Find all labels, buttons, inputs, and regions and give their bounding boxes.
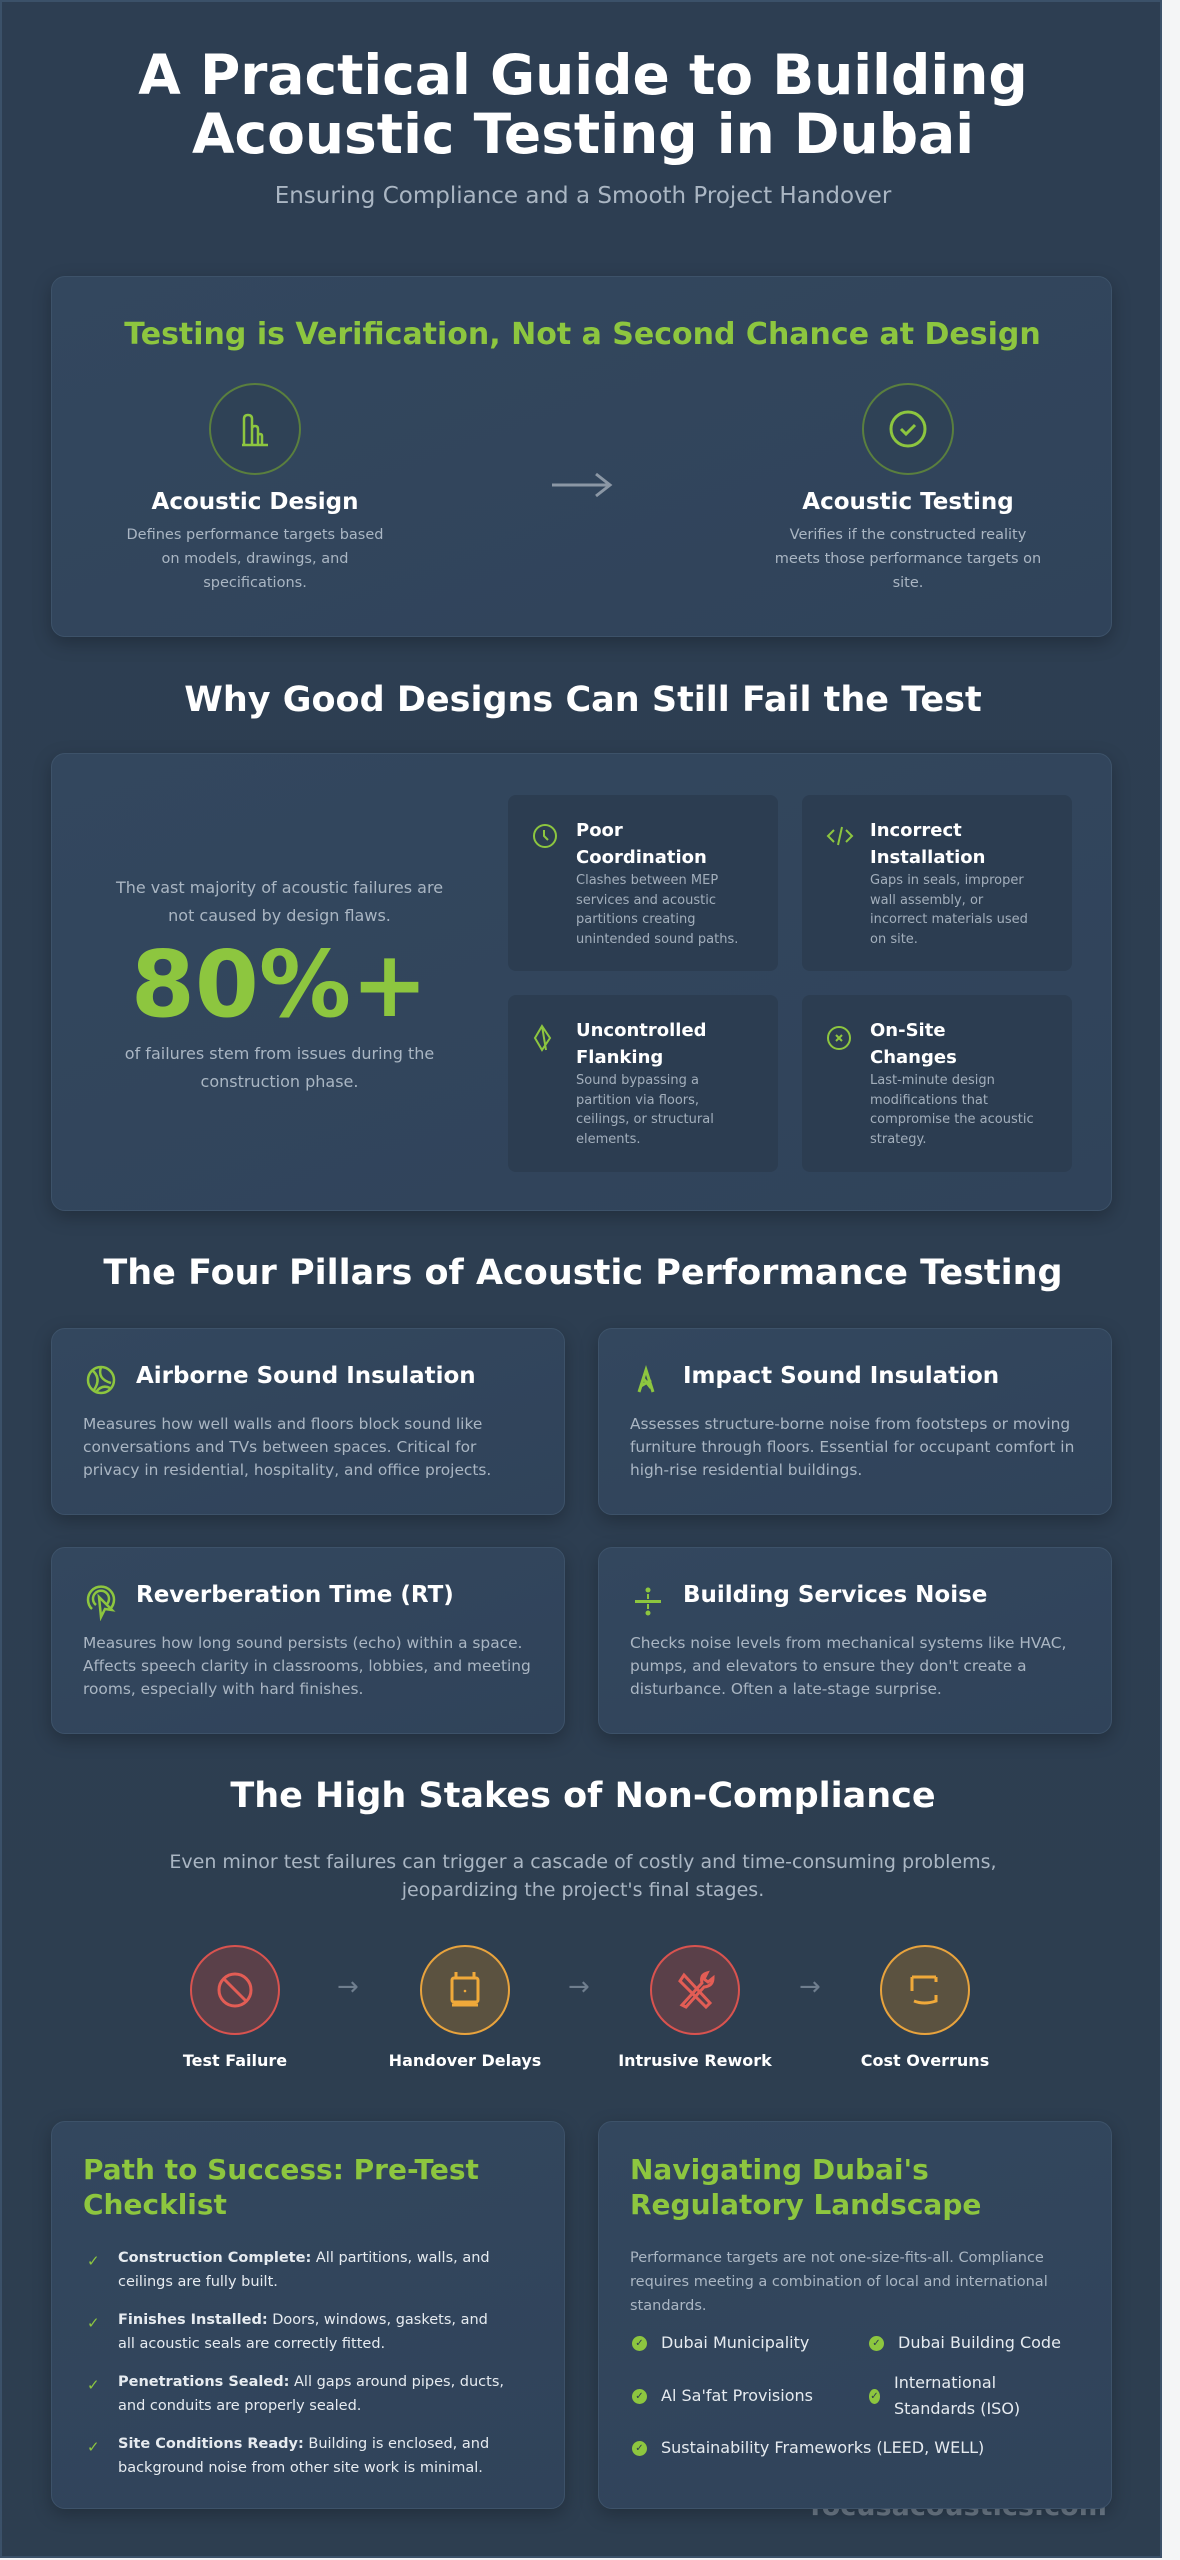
icon: flank: [534, 1024, 552, 1052]
paragraph: stakes: jeopardizing the project's final stages.: [402, 1879, 764, 1901]
title: Acoustic Testing in Dubai: [192, 102, 974, 166]
panel: checklist: and conduits are properly sealed.: [118, 2398, 361, 2414]
text: testing: site.: [893, 575, 923, 591]
icon: cost overruns: [880, 1945, 970, 2035]
arrow: →: [568, 1972, 590, 2002]
paragraph: stakes: Even minor test failures can trigger a cascade of costly and time-consuming problems,: [169, 1851, 997, 1873]
heading: high stakes: The High Stakes of Non-Compliance: [230, 1776, 936, 1816]
pillar: services noise: Building Services Noise: [683, 1582, 987, 1608]
text: design: [126, 489, 384, 591]
card: poor coordination: Clashes between MEP services and acoustic partitions creating unintended sound paths.: [576, 873, 738, 946]
text: design: specifications.: [203, 575, 307, 591]
stat text: not caused by design flaws.: [168, 906, 391, 925]
panel: regulatory: International Standards (ISO): [894, 2373, 1020, 2418]
text: design: Defines performance targets based: [126, 527, 384, 543]
paragraph: stakes: [169, 1851, 997, 1901]
stat text: of failures stem from issues during the: [125, 1044, 434, 1063]
panel: checklist: Finishes Installed: Doors, windows, gaskets, and: [118, 2312, 488, 2328]
panel: checklist: Construction Complete: All partitions, walls, and: [118, 2250, 490, 2266]
card: incorrect installation: [802, 795, 1072, 971]
card: poor coordination: [508, 795, 778, 971]
panel: checklist: background noise from other site work is minimal.: [118, 2460, 483, 2476]
stat text: 80%+: [131, 931, 428, 1038]
label: cost overruns: Cost Overruns: [861, 2051, 989, 2070]
panel: regulatory: Sustainability Frameworks (LEED, WELL): [661, 2438, 984, 2457]
panel: verification: [51, 276, 1112, 637]
pillar: reverberation: Measures how long sound persists (echo) within a space. Affects speech clarity in classrooms, lobbies, and meeting rooms, especially with hard finishes.: [83, 1634, 531, 1698]
card: flanking: [508, 995, 778, 1172]
pillar: airborne: Airborne Sound Insulation: [136, 1363, 476, 1389]
heading: why designs fail: Why Good Designs Can Still Fail the Test: [184, 680, 982, 720]
pillar: airborne: [51, 1328, 565, 1515]
heading: regulatory: [630, 2153, 981, 2221]
icon: test failure: [190, 1945, 280, 2035]
item 4: [87, 2436, 489, 2476]
text: testing: Verifies if the constructed reality: [790, 527, 1026, 543]
label: test failure: Test Failure: [183, 2051, 287, 2070]
panel: regulatory: Al Sa'fat Provisions: [661, 2386, 813, 2405]
pillar: reverberation: [51, 1547, 565, 1734]
icon: reverb: [86, 1585, 116, 1621]
card: flanking: Sound bypassing a partition via floors, ceilings, or structural elements.: [576, 1073, 714, 1146]
icon: impact: [638, 1365, 654, 1392]
panel: checklist: ✓: [87, 2438, 100, 2456]
icon: testing: [862, 383, 954, 475]
panel: checklist: [51, 2121, 565, 2509]
icon: divide: [635, 1588, 661, 1616]
icon: handover delays: [420, 1945, 510, 2035]
card: on-site changes: Changes: [870, 1047, 957, 1068]
panel: regulatory: ✓: [635, 2338, 644, 2349]
card: flanking: Flanking: [576, 1047, 663, 1068]
card: incorrect installation: Gaps in seals, improper wall assembly, or incorrect materials used on site.: [870, 873, 1028, 946]
panel: checklist: Site Conditions Ready: Building is enclosed, and: [118, 2436, 489, 2452]
panel: checklist: all acoustic seals are correctly fitted.: [118, 2336, 385, 2352]
card: on-site changes: [802, 995, 1072, 1172]
text: design: Acoustic Design: [152, 489, 358, 515]
icon: design: [209, 383, 301, 475]
card: poor coordination: Poor: [576, 820, 623, 841]
pillar: impact: Assesses structure-borne noise from footsteps or moving furniture through floors. Essential for occupant comfort in high-rise residential buildings.: [630, 1415, 1074, 1479]
item: sustainability: [632, 2438, 984, 2457]
icon: rework: [650, 1945, 740, 2035]
arrow: [552, 473, 612, 497]
panel: regulatory: ✓: [870, 2391, 879, 2402]
item 3: [87, 2374, 504, 2414]
heading: checklist: [83, 2153, 479, 2221]
card: incorrect installation: Incorrect: [870, 820, 962, 841]
panel: regulatory: ✓: [635, 2391, 644, 2402]
heading: verification: Testing is Verification, Not a Second Chance at Design: [124, 317, 1041, 352]
pillar: impact: [598, 1328, 1112, 1515]
item: Dubai Building Code: [869, 2333, 1061, 2352]
item: Dubai Municipality: [632, 2333, 809, 2352]
item: ISO: [869, 2373, 1020, 2418]
panel: regulatory: ✓: [635, 2443, 644, 2454]
card: on-site changes: On-Site: [870, 1020, 946, 1041]
paragraph: regulatory: Performance targets are not one-size-fits-all. Compliance requires meeting a combination of local and international standards.: [630, 2250, 1048, 2314]
card: flanking: Uncontrolled: [576, 1020, 707, 1041]
panel: regulatory: Dubai Building Code: [898, 2333, 1061, 2352]
card: incorrect installation: Installation: [870, 847, 985, 868]
panel: regulatory: Dubai Municipality: [661, 2333, 809, 2352]
panel: regulatory: ✓: [872, 2338, 881, 2349]
pillar: airborne: Measures how well walls and floors block sound like conversations and TVs between spaces. Critical for privacy in residential, hospitality, and office projects.: [83, 1415, 491, 1479]
panel: failures: [51, 753, 1112, 1211]
pillar: services noise: [598, 1547, 1112, 1734]
title: [138, 43, 1028, 166]
pillar: reverberation: Reverberation Time (RT): [136, 1582, 454, 1608]
heading: checklist: Checklist: [83, 2188, 227, 2221]
item 2: [87, 2312, 488, 2352]
stat text: The vast majority of acoustic failures are: [116, 878, 443, 897]
text: design: on models, drawings, and: [162, 551, 348, 567]
panel: checklist: ✓: [87, 2252, 100, 2270]
label: intrusive rework: Intrusive Rework: [618, 2051, 772, 2070]
arrow: →: [799, 1972, 821, 2002]
pillar: impact: Impact Sound Insulation: [683, 1363, 999, 1389]
item: Al Sa'fat: [632, 2386, 813, 2405]
panel: checklist: Penetrations Sealed: All gaps around pipes, ducts,: [118, 2374, 504, 2390]
stat text: construction phase.: [201, 1072, 358, 1091]
icon: x circle: [827, 1026, 851, 1050]
panel: checklist: ceilings are fully built.: [118, 2274, 278, 2290]
panel: checklist: ✓: [87, 2376, 100, 2394]
icon: clock: [533, 824, 557, 848]
label: handover delays: Handover Delays: [389, 2051, 541, 2070]
icon: code: [826, 826, 854, 846]
heading: checklist: Path to Success: Pre-Test: [83, 2153, 479, 2186]
arrow: →: [337, 1972, 359, 2002]
item 1: [87, 2250, 490, 2290]
heading: four pillars: The Four Pillars of Acoustic Performance Testing: [103, 1253, 1063, 1293]
card: on-site changes: Last-minute design modifications that compromise the acoustic strategy.: [870, 1073, 1034, 1146]
heading: regulatory: Navigating Dubai's: [630, 2153, 929, 2186]
subtitle: Ensuring Compliance and a Smooth Project Handover: [275, 183, 891, 209]
icon: airborne: [86, 1366, 116, 1394]
stat text: [116, 878, 443, 1091]
panel: regulatory: [598, 2121, 1112, 2509]
text: testing: meets those performance targets on: [775, 551, 1041, 567]
heading: regulatory: Regulatory Landscape: [630, 2188, 981, 2221]
text: testing: [775, 489, 1041, 591]
panel: checklist: ✓: [87, 2314, 100, 2332]
text: testing: Acoustic Testing: [802, 489, 1014, 515]
pillar: services noise: Checks noise levels from mechanical systems like HVAC, pumps, and elevators to ensure they don't create a disturbance. Often a late-stage surprise.: [630, 1634, 1066, 1698]
card: poor coordination: Coordination: [576, 847, 707, 868]
watermark: focusacoustics.com: [810, 2491, 1107, 2522]
title: A Practical Guide to Building: [138, 43, 1028, 107]
